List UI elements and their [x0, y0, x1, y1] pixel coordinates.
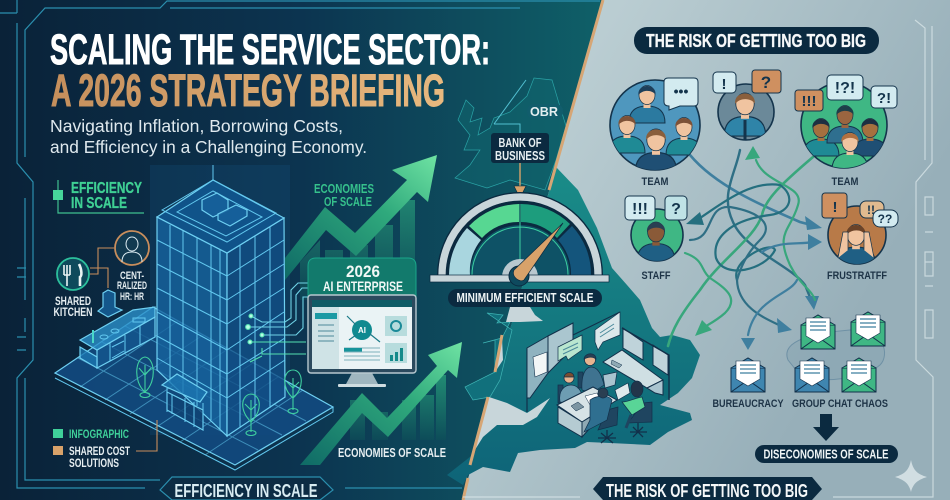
heading: efficiency in scale [53, 180, 144, 213]
group: team blue [609, 80, 702, 172]
subtitle: Navigating Inflation, Borrowing Costs, [50, 116, 343, 136]
label: economies of scale upper: ECONOMIES [314, 181, 374, 196]
speech bubbles: staff: ? [671, 201, 681, 218]
label: centralized HR [117, 270, 147, 303]
monitor with AI dashboard: AI [358, 326, 366, 335]
speech bubble: team blue [664, 78, 698, 110]
label: shared kitchen: SHARED [55, 294, 91, 308]
tangled communication arrows [668, 146, 822, 350]
map: England and Wales [447, 167, 700, 485]
2026 AI enterprise tag: 2026 [346, 262, 380, 281]
label: team left: TEAM [642, 176, 668, 188]
speech bubble: team blue: ••• [674, 83, 688, 99]
subtitle [50, 116, 367, 157]
speech bubbles: staff: !!! [632, 201, 648, 218]
monitor with AI dashboard [308, 295, 416, 387]
map: Irish Sea north [506, 307, 543, 322]
gauge: minimum efficient scale [430, 192, 609, 286]
label: economies of scale lower: ECONOMIES OF SCALE [338, 445, 446, 460]
label: centralized HR: CENT- [120, 270, 144, 282]
arrow: down to diseconomies [813, 414, 839, 441]
connector: map to Bank of Business [494, 80, 526, 133]
person right [666, 117, 697, 156]
person top [629, 86, 665, 123]
office scene: team in cubicle [527, 312, 669, 443]
banner: the risk of getting too big [593, 477, 822, 500]
circuit lines: building to monitor [246, 283, 315, 362]
label: centralized HR: HR: HR [120, 291, 144, 303]
2026 AI enterprise tag [308, 258, 416, 296]
speech bubbles: team green: !?! [835, 80, 855, 97]
label: economies of scale upper: OF SCALE [324, 194, 372, 209]
trees [137, 357, 301, 436]
title: SCALING THE SERVICE SECTOR: [50, 26, 490, 74]
label: Bank of Business [491, 133, 549, 163]
person center [635, 129, 677, 172]
person back left and rear [558, 354, 617, 404]
legend: SHARED COST [69, 444, 130, 458]
speech bubbles: team green [795, 75, 897, 111]
speech bubbles: team lead: ? [761, 73, 771, 92]
legend: SOLUTIONS [69, 456, 119, 470]
speech bubbles: frustrated: ! [832, 199, 838, 216]
pill: diseconomies of scale: DISECONOMIES OF SCALE [764, 448, 888, 462]
legend: INFOGRAPHIC [69, 427, 129, 441]
label: Bank of Business: BUSINESS [495, 149, 545, 163]
person: frustrated [828, 206, 886, 266]
connector: shared kitchen to HR [90, 248, 114, 288]
pill: diseconomies of scale [755, 445, 898, 463]
arrow: economies of scale lower [300, 342, 462, 465]
isometric building on plot [55, 165, 333, 470]
pointer: gold triangle [514, 163, 526, 198]
map: Bristol Channel [473, 397, 550, 453]
label: Bank of Business: BANK OF [498, 136, 542, 150]
icon: sparkle [895, 460, 927, 492]
speech bubbles: team green: !!! [802, 93, 816, 110]
label: group chat chaos: GROUP CHAT CHAOS [792, 398, 888, 410]
label: economies of scale upper [314, 181, 374, 209]
people front [584, 381, 652, 443]
plot [55, 307, 333, 470]
heading pill: the risk of getting too big: THE RISK OF GETTING TOO BIG [646, 30, 866, 51]
speech bubbles: frustrated: !! [867, 203, 875, 217]
title [50, 26, 490, 116]
group: team green [801, 82, 888, 170]
label: team right: TEAM [832, 176, 858, 188]
heading pill: the risk of getting too big [634, 27, 879, 54]
speech bubbles: frustrated: ?? [878, 212, 892, 226]
speech bubbles: team lead [713, 70, 781, 93]
title: A 2026 STRATEGY BRIEFING [51, 65, 445, 116]
speech bubbles: frustrated [822, 193, 898, 227]
label: bureaucracy: BUREAUCRACY [712, 398, 784, 410]
legend [53, 420, 157, 470]
map: Scotland outline [455, 78, 566, 190]
tower [157, 165, 285, 436]
subtitle: and Efficiency in a Challenging Economy. [50, 137, 367, 157]
heading: efficiency in scale: EFFICIENCY [71, 180, 143, 197]
label: OBR: OBR [530, 104, 559, 119]
arrow: economies of scale upper [285, 155, 437, 300]
glow behind building [150, 165, 290, 435]
frame: left panel [0, 0, 600, 488]
speech bubbles: staff [625, 196, 687, 220]
right partitions and desk [603, 328, 669, 400]
2026 AI enterprise tag: AI ENTERPRISE [323, 278, 403, 294]
pill: minimum efficient scale: MINIMUM EFFICIENT SCALE [456, 291, 594, 305]
envelopes: group chat chaos [731, 312, 885, 392]
label: shared kitchen: KITCHEN [54, 305, 92, 319]
back partitions [527, 312, 620, 412]
person: team lead [718, 84, 774, 140]
divider: gold diagonal [463, 0, 603, 500]
person left [609, 116, 645, 153]
map: United Kingdom [447, 78, 700, 485]
tangle cloud behind envelopes [787, 330, 885, 380]
kitchen counter [80, 290, 155, 368]
label: staff: STAFF [642, 270, 671, 282]
background: left panel [0, 0, 603, 500]
heading: efficiency in scale: IN SCALE [71, 195, 127, 212]
map: Cardigan Bay [495, 338, 503, 372]
label: shared kitchen [54, 294, 92, 319]
label: centralized HR: RALIZED [117, 280, 147, 292]
map: Welsh coast lobes [465, 313, 512, 400]
person: staff [631, 209, 683, 261]
central desk [557, 387, 617, 437]
label: frustrated staff: FRUSTRATFF [827, 270, 887, 282]
banner: efficiency in scale [160, 477, 333, 500]
speech bubbles: team lead: ! [722, 76, 726, 93]
icon: centralized HR [115, 231, 149, 265]
frame: right panel [463, 20, 933, 497]
icon: shared kitchen [57, 258, 89, 290]
pill: minimum efficient scale [448, 289, 602, 307]
speech bubbles: team green: ?! [877, 90, 891, 107]
